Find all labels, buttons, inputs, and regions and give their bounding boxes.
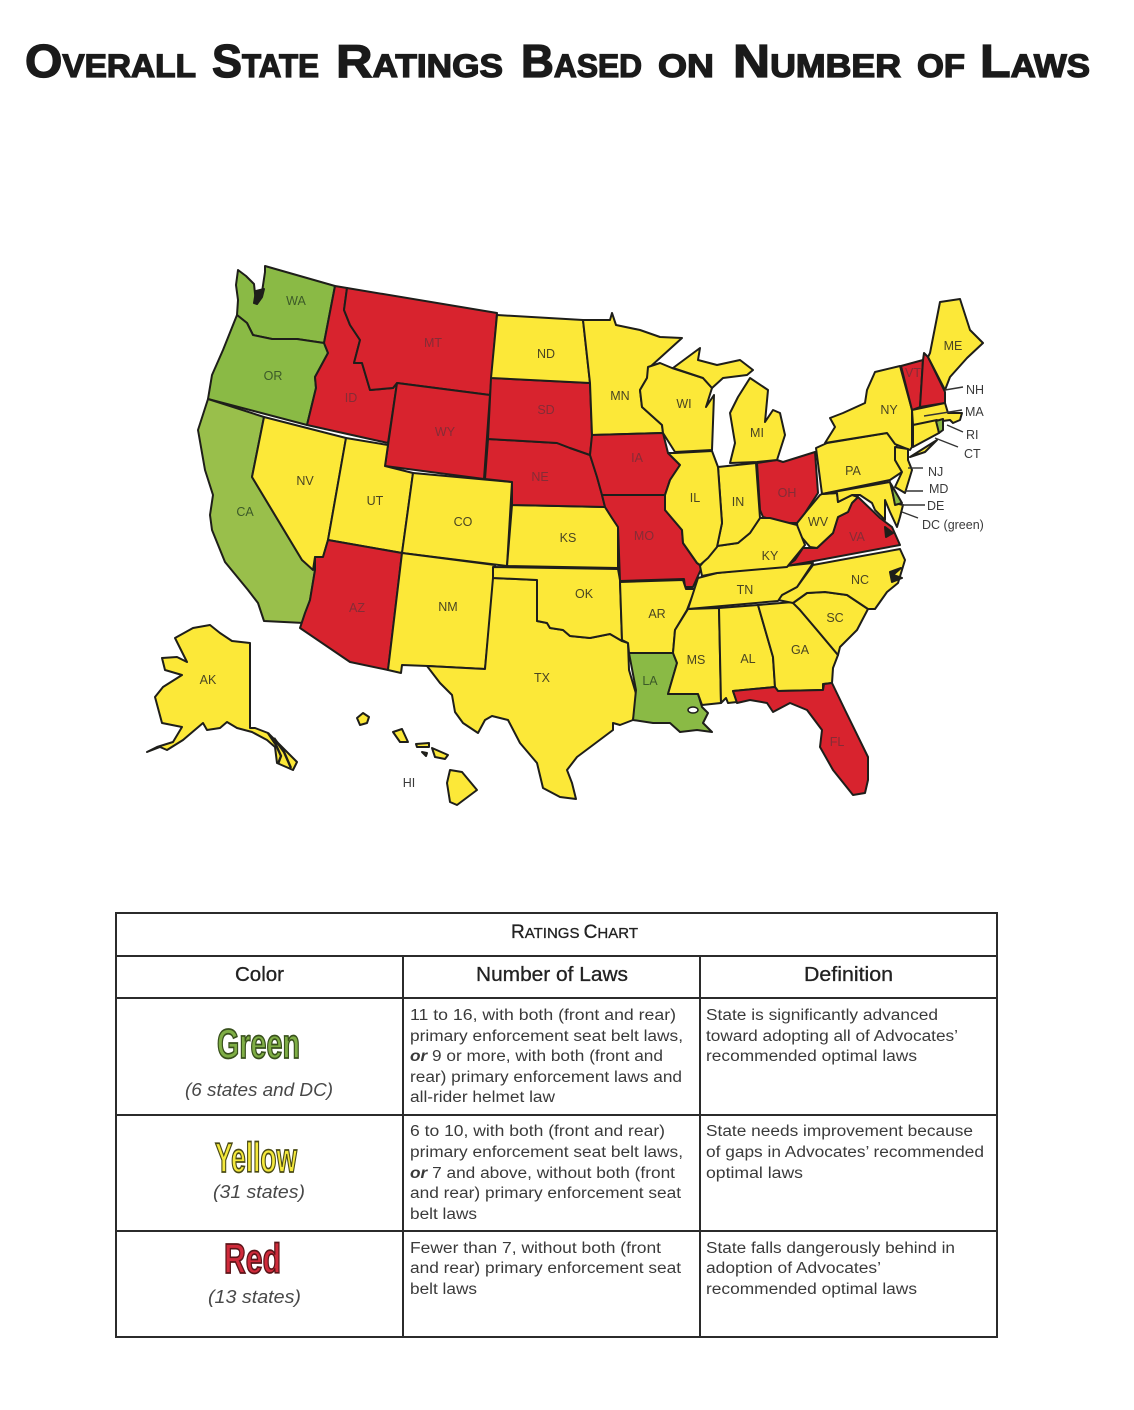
state: Maine	[928, 299, 983, 390]
title: LAWS	[980, 35, 1090, 87]
state: North Dakota	[491, 315, 590, 383]
state: Utah: UT	[367, 494, 384, 508]
state: Alaska: AK	[200, 673, 217, 687]
column header: number of laws: Number of Laws	[476, 964, 628, 986]
title: NUMBER	[733, 35, 901, 87]
state: New Hampshire	[920, 353, 945, 407]
yellow: number of laws: belt laws	[410, 1206, 477, 1223]
state: West Virginia	[797, 493, 858, 548]
state: Louisiana	[629, 653, 712, 732]
state: Indiana	[717, 463, 760, 546]
rating: yellow: (31 states)	[213, 1182, 305, 1202]
state: South Carolina: SC	[826, 611, 844, 625]
state: Illinois	[665, 451, 722, 565]
state: Texas	[427, 578, 637, 799]
title: OF	[917, 48, 965, 84]
yellow: number of laws: or 7 and above, without both (front	[410, 1165, 676, 1182]
state: Wyoming: WY	[435, 425, 456, 439]
state: Oregon: OR	[264, 369, 282, 383]
green: number of laws: 11 to 16, with both (front and rear)	[410, 1007, 676, 1024]
callout labels: small eastern states: RI	[966, 428, 978, 442]
state: Florida	[733, 683, 868, 795]
green: number of laws: all-rider helmet law	[410, 1089, 556, 1106]
callout labels: small eastern states: MA	[965, 405, 984, 419]
state: Washington	[236, 266, 335, 343]
callout labels: small eastern states: NH	[966, 383, 984, 397]
column header: color: Color	[235, 964, 284, 986]
state: Idaho	[307, 286, 397, 443]
state: New Mexico: NM	[438, 600, 458, 614]
state: Virginia: VA	[849, 530, 866, 544]
callout labels: small eastern states: DC (green)	[922, 518, 984, 532]
yellow: number of laws: and rear) primary enforcement seat	[410, 1185, 682, 1202]
rating: yellow: Yellow	[215, 1134, 297, 1181]
title: ON	[658, 48, 714, 84]
state: Georgia: GA	[791, 643, 810, 657]
yellow: definition: of gaps in Advocates’ recommended	[706, 1144, 984, 1161]
state: North Dakota: ND	[537, 347, 555, 361]
callout labels: small eastern states	[902, 383, 984, 532]
state: Washington: WA	[286, 294, 306, 308]
state: Iowa: IA	[631, 451, 644, 465]
state: South Dakota	[488, 378, 592, 455]
state: Ohio	[757, 452, 818, 523]
state: Kansas	[507, 505, 618, 568]
red: number of laws	[410, 1240, 682, 1298]
rating: green: Green	[217, 1020, 300, 1067]
state: Louisiana: LA	[642, 674, 658, 688]
state: Oklahoma: OK	[575, 587, 594, 601]
us map	[147, 266, 984, 805]
state: Arizona: AZ	[349, 601, 365, 615]
state: Ohio: OH	[778, 486, 796, 500]
state: Iowa	[590, 433, 680, 495]
green: number of laws: rear) primary enforcement laws and	[410, 1069, 682, 1086]
callout labels: small eastern states: MD	[929, 482, 948, 496]
state: Arizona	[300, 540, 402, 670]
state: Rhode Island	[936, 419, 943, 433]
state: Pennsylvania: PA	[845, 464, 862, 478]
green: definition	[706, 1007, 958, 1065]
state: Minnesota	[583, 313, 682, 435]
column header: definition: Definition	[804, 964, 893, 986]
state: Minnesota: MN	[610, 389, 630, 403]
state: Colorado	[402, 473, 512, 566]
state: Colorado: CO	[454, 515, 473, 529]
state: Idaho: ID	[345, 391, 357, 405]
state: Montana: MT	[424, 336, 442, 350]
state: New Jersey	[895, 447, 912, 493]
state: Arkansas: AR	[648, 607, 666, 621]
state: Oklahoma	[493, 567, 622, 641]
state: Missouri: MO	[634, 529, 654, 543]
rating: green: (6 states and DC)	[185, 1080, 333, 1100]
state: South Dakota: SD	[537, 403, 555, 417]
yellow: definition	[706, 1123, 984, 1182]
red: definition: adoption of Advocates’	[706, 1260, 881, 1277]
state: West Virginia: WV	[808, 515, 829, 529]
state: Mississippi	[668, 608, 721, 705]
callout labels: small eastern states: CT	[964, 447, 981, 461]
rating: red	[208, 1235, 301, 1307]
state: Utah	[328, 438, 413, 553]
state: Vermont: VT	[905, 366, 921, 380]
state: Wyoming	[385, 383, 490, 479]
title: STATE	[212, 35, 319, 87]
state: Illinois: IL	[690, 491, 700, 505]
state: Nevada: NV	[296, 474, 314, 488]
title: OVERALL	[25, 35, 196, 87]
state: Alabama	[719, 605, 775, 703]
state: Massachusetts	[912, 403, 962, 425]
green: number of laws: primary enforcement seat belt laws,	[410, 1028, 683, 1045]
ratings chart table	[116, 913, 997, 1337]
title: BASED	[521, 35, 642, 87]
state: California	[198, 399, 315, 623]
state: Montana	[344, 288, 497, 395]
state: Missouri	[602, 495, 702, 587]
state: North Carolina	[778, 549, 905, 609]
state: Long Island	[910, 440, 937, 457]
state: Tennessee: TN	[737, 583, 753, 597]
callout labels: small eastern states: DE	[927, 499, 944, 513]
state: Indiana: IN	[732, 495, 744, 509]
title	[25, 35, 1090, 87]
yellow: number of laws	[410, 1123, 683, 1223]
red: number of laws: and rear) primary enforcement seat	[410, 1260, 682, 1277]
red: definition: State falls dangerously behind in	[706, 1240, 955, 1257]
rating: green	[185, 1020, 333, 1100]
state: Alabama: AL	[740, 652, 756, 666]
state: Georgia	[758, 602, 838, 691]
state: South Carolina	[793, 592, 868, 655]
rating: yellow	[213, 1134, 305, 1202]
title: RATINGS	[336, 35, 503, 87]
state: Florida: FL	[830, 735, 844, 749]
green: number of laws	[410, 1007, 683, 1106]
state: Maine: ME	[944, 339, 962, 353]
state: Nevada	[252, 417, 346, 570]
state: Arkansas	[620, 580, 695, 653]
table title: RATINGS CHART	[511, 922, 638, 943]
state: Nebraska: NE	[531, 470, 549, 484]
rating: red: Red	[224, 1235, 281, 1282]
state: New York: NY	[880, 403, 898, 417]
state: Tennessee	[688, 563, 813, 609]
green: number of laws: or 9 or more, with both (front and	[410, 1048, 663, 1065]
yellow: number of laws: 6 to 10, with both (front and rear)	[410, 1123, 665, 1140]
state: Maryland	[822, 482, 903, 527]
state: New York	[825, 366, 912, 450]
yellow: number of laws: primary enforcement seat belt laws,	[410, 1144, 683, 1161]
state: Wisconsin	[640, 363, 714, 452]
state: Virginia	[787, 497, 900, 566]
yellow: definition: optimal laws	[706, 1165, 803, 1182]
state: Delaware	[891, 484, 902, 505]
green: definition: recommended optimal laws	[706, 1048, 917, 1065]
state: Mississippi: MS	[687, 653, 705, 667]
state: Hawaii: HI	[403, 776, 415, 790]
state: California: CA	[236, 505, 254, 519]
state: Texas: TX	[534, 671, 551, 685]
state: Pennsylvania	[816, 433, 902, 494]
state: Nebraska	[485, 439, 605, 507]
callout labels: small eastern states: NJ	[928, 465, 943, 479]
red: number of laws: Fewer than 7, without both (front	[410, 1240, 662, 1257]
state: Wisconsin: WI	[676, 397, 692, 411]
state: Vermont	[901, 360, 923, 410]
state: New Mexico	[388, 553, 495, 673]
red: number of laws: belt laws	[410, 1281, 477, 1298]
rating: red: (13 states)	[208, 1287, 301, 1307]
yellow: definition: State needs improvement because	[706, 1123, 973, 1140]
state: Kansas: KS	[560, 531, 576, 545]
red: definition: recommended optimal laws	[706, 1281, 917, 1298]
red: definition	[706, 1240, 955, 1298]
state: Alaska	[147, 625, 297, 770]
state: Oregon	[208, 315, 328, 425]
state: Michigan: MI	[750, 426, 764, 440]
state: Michigan	[673, 348, 785, 463]
state: North Carolina: NC	[851, 573, 869, 587]
green: definition: State is significantly advanced	[706, 1007, 938, 1024]
green: definition: toward adopting all of Advocates’	[706, 1028, 958, 1045]
state: Connecticut	[913, 420, 939, 447]
state: Hawaii	[357, 713, 477, 805]
state: Kentucky: KY	[762, 549, 779, 563]
state: Kentucky	[700, 518, 805, 576]
